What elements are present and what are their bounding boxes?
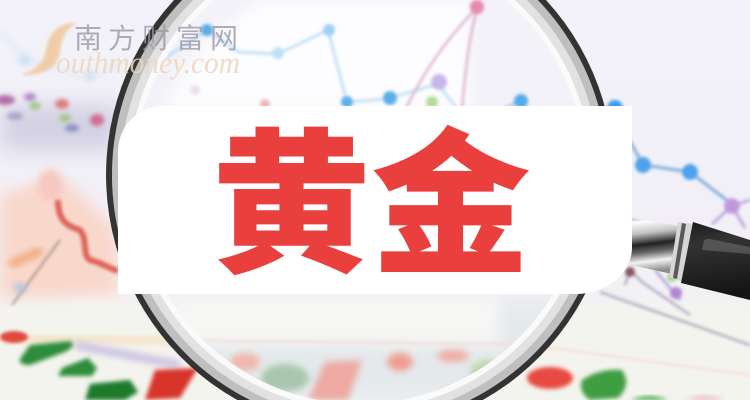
magnifier ring <box>106 0 614 400</box>
left faint blue chart line <box>0 30 130 81</box>
handle: black grip <box>681 222 750 300</box>
magnifier lens interior <box>166 0 549 400</box>
left blurred candlesticks <box>0 93 104 132</box>
right blue chart line <box>607 100 750 228</box>
lens white highlight <box>178 5 465 105</box>
magnifier handle <box>622 217 750 300</box>
bottom-right candlesticks <box>527 367 725 400</box>
bottom-left candlesticks <box>0 331 198 400</box>
lens chart lines <box>165 0 528 110</box>
watermark Chinese name: 南方财富网 <box>74 23 238 54</box>
watermark domain: outhmoney.com <box>56 45 240 80</box>
left red trend line <box>10 169 118 305</box>
watermark logo swirl <box>20 23 77 75</box>
watermark <box>20 23 240 80</box>
handle: silver collar <box>622 217 680 274</box>
lens blurred candles <box>230 350 510 400</box>
title: 黄金 <box>212 120 530 294</box>
lower right dark chart lines <box>600 267 750 345</box>
white title panel <box>118 106 632 294</box>
